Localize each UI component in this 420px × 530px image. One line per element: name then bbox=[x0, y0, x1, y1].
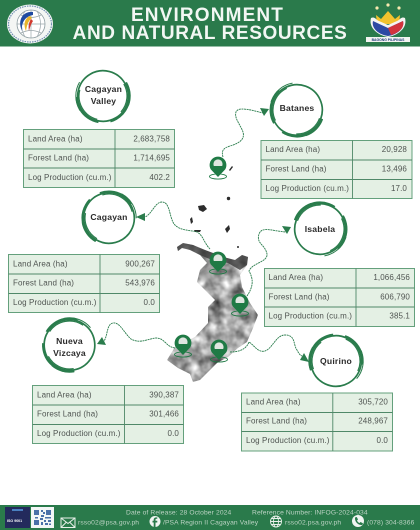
arrow: route to Isabela bbox=[247, 226, 291, 296]
table: Cagayan Valley: Log Production (cu.m.) bbox=[28, 173, 112, 182]
table: Cagayan: 0.0 bbox=[144, 298, 155, 307]
ring label: Nueva Vizcaya bbox=[38, 313, 101, 377]
table: Isabela bbox=[264, 268, 414, 326]
ring label: Cagayan Valley bbox=[66, 59, 140, 133]
table: Nueva Vizcaya: Log Production (cu.m.) bbox=[37, 429, 121, 438]
text: reference number: Reference Number: INFOG-2024-034 bbox=[252, 510, 368, 516]
icon: ISO certification badge: ISO 9001 bbox=[7, 519, 22, 523]
table: Cagayan Valley: Forest Land (ha) bbox=[28, 154, 89, 162]
map of Cagayan Valley region bbox=[167, 166, 258, 382]
table: Cagayan Valley: 402.2 bbox=[149, 173, 170, 182]
table: Cagayan: 900,267 bbox=[125, 260, 155, 268]
table: Batanes: Log Production (cu.m.) bbox=[266, 184, 349, 193]
table: Isabela: Land Area (ha) bbox=[268, 273, 323, 282]
ring label: Cagayan Valley: Valley bbox=[91, 96, 116, 106]
map: Babuyan and Batanes islands bbox=[190, 166, 239, 248]
text: facebook page: /PSA Region II Cagayan Valley bbox=[163, 520, 259, 526]
table: Batanes: 20,928 bbox=[382, 145, 407, 154]
table: Cagayan bbox=[8, 254, 160, 312]
icon: phone bbox=[352, 515, 364, 527]
table: Isabela: Log Production (cu.m.) bbox=[268, 312, 352, 320]
map: dark northern coast bbox=[177, 243, 248, 270]
table: Batanes bbox=[261, 140, 412, 198]
icon: PSA seal logo bbox=[7, 4, 53, 44]
table: Quirino: 0.0 bbox=[377, 436, 388, 445]
table: Quirino: Forest Land (ha) bbox=[246, 416, 307, 426]
icon: Bagong Pilipinas logo: BAGONG PILIPINAS bbox=[372, 38, 405, 42]
table: Isabela: 606,790 bbox=[380, 292, 410, 302]
ring label: Batanes bbox=[262, 75, 332, 145]
icon: Isabela pin bbox=[232, 294, 248, 316]
title bbox=[73, 5, 347, 44]
table: Quirino: Log Production (cu.m.) bbox=[246, 436, 330, 445]
panel: Batanes bbox=[261, 75, 412, 198]
icon: Nueva Vizcaya pin bbox=[174, 335, 192, 357]
table: Isabela: 385.1 bbox=[389, 312, 410, 320]
arrow: route to Nueva Vizcaya bbox=[97, 323, 175, 348]
table: Quirino: Land Area (ha) bbox=[246, 398, 301, 406]
table: Nueva Vizcaya: Forest Land (ha) bbox=[37, 410, 98, 418]
icon: Quirino pin bbox=[210, 340, 228, 362]
ring label: Isabela bbox=[285, 194, 355, 264]
table: Cagayan: Land Area (ha) bbox=[13, 260, 68, 268]
text: website: rsso02.psa.gov.ph bbox=[285, 520, 341, 526]
table: Batanes: 17.0 bbox=[391, 184, 407, 193]
ring label: Quirino bbox=[301, 326, 371, 396]
table: Nueva Vizcaya: 0.0 bbox=[168, 429, 179, 438]
table: Cagayan Valley bbox=[24, 130, 174, 188]
ring label: Batanes: Batanes bbox=[280, 103, 314, 113]
text: phone number: (078) 304-8366 bbox=[367, 520, 415, 526]
table: Nueva Vizcaya: 390,387 bbox=[149, 390, 179, 400]
table: Cagayan Valley: 2,683,758 bbox=[133, 134, 170, 144]
table: Cagayan: 543,976 bbox=[125, 278, 155, 288]
icon: Bagong Pilipinas logo bbox=[366, 3, 410, 42]
ring label: Nueva Vizcaya: Vizcaya bbox=[53, 348, 86, 358]
table: Batanes: 13,496 bbox=[382, 164, 407, 174]
icon: globe bbox=[270, 516, 282, 527]
ring label: Nueva Vizcaya: Nueva bbox=[56, 336, 83, 346]
panel: Isabela bbox=[264, 194, 414, 326]
table: Cagayan Valley: Land Area (ha) bbox=[28, 134, 83, 144]
panel: Cagayan bbox=[8, 181, 160, 312]
table: Cagayan: Log Production (cu.m.) bbox=[13, 298, 97, 307]
table: Cagayan Valley: 1,714,695 bbox=[133, 154, 170, 162]
table: Quirino: 305,720 bbox=[358, 398, 388, 406]
icon: mail bbox=[61, 518, 75, 528]
text: release date: Date of Release: 28 October 2024 bbox=[126, 510, 231, 516]
ring label: Cagayan bbox=[72, 181, 146, 255]
table: Isabela: Forest Land (ha) bbox=[268, 292, 330, 302]
title: ENVIRONMENT bbox=[131, 5, 284, 26]
table: Cagayan: Forest Land (ha) bbox=[13, 278, 74, 288]
map: mainland bbox=[167, 243, 258, 382]
icon: facebook bbox=[150, 516, 160, 527]
arrow: route to Batanes bbox=[222, 108, 269, 157]
icon: QR code bbox=[31, 507, 54, 528]
table: Quirino bbox=[242, 393, 392, 451]
ring label: Quirino: Quirino bbox=[320, 356, 352, 366]
footer band bbox=[0, 505, 420, 530]
header band bbox=[0, 0, 420, 46]
panel: Quirino bbox=[242, 326, 392, 451]
table: Nueva Vizcaya bbox=[32, 386, 184, 444]
ring label: Cagayan: Cagayan bbox=[90, 212, 128, 222]
table: Batanes: Forest Land (ha) bbox=[266, 164, 327, 174]
title: AND NATURAL RESOURCES bbox=[73, 23, 347, 44]
text: email: rsso02@psa.gov.ph bbox=[78, 520, 139, 526]
icon: ISO certification badge bbox=[5, 507, 30, 528]
ring label: Isabela: Isabela bbox=[305, 224, 335, 234]
arrow: route to Cagayan bbox=[136, 202, 210, 249]
arrow: route to Quirino bbox=[230, 335, 309, 362]
icon: Batanes pin bbox=[210, 157, 226, 179]
ring label: Cagayan Valley: Cagayan bbox=[85, 84, 122, 94]
icon: Cagayan pin bbox=[210, 252, 226, 274]
panel: Cagayan Valley bbox=[24, 59, 174, 187]
table: Nueva Vizcaya: Land Area (ha) bbox=[37, 390, 92, 400]
table: Batanes: Land Area (ha) bbox=[266, 145, 320, 154]
table: Quirino: 248,967 bbox=[358, 416, 388, 426]
table: Nueva Vizcaya: 301,466 bbox=[149, 410, 179, 418]
panel: Nueva Vizcaya bbox=[32, 313, 184, 444]
table: Isabela: 1,066,456 bbox=[373, 273, 410, 282]
